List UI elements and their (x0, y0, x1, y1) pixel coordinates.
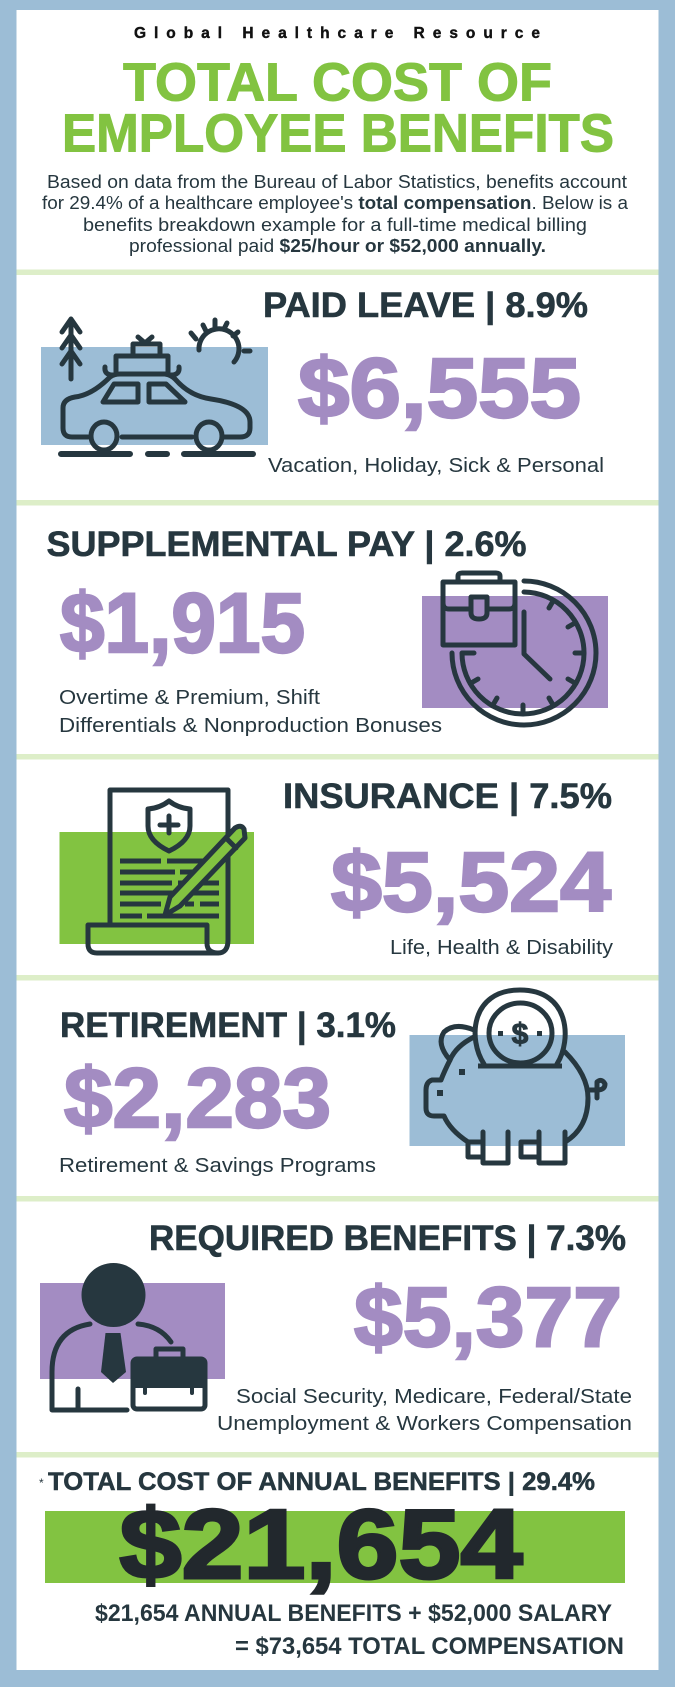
description: Vacation, Holiday, Sick & Personal (268, 455, 604, 477)
intro text: benefits breakdown example for a full-time medical billing (83, 215, 587, 235)
total compensation equation: $21,654 ANNUAL BENEFITS + $52,000 SALARY (95, 1600, 612, 1627)
total compensation equation (95, 1600, 624, 1660)
heading: RETIREMENT | 3.1% (60, 1006, 396, 1045)
panel: retirement (59, 990, 625, 1177)
description: Overtime & Premium, Shift (59, 687, 320, 709)
heading: PAID LEAVE | 8.9% (263, 286, 588, 325)
green band (45, 1511, 625, 1583)
amount: $6,555 (298, 341, 581, 435)
icon: clock and briefcase (422, 573, 608, 725)
footnote marker: * (39, 1476, 44, 1490)
amount: $5,524 (331, 835, 611, 929)
heading: SUPPLEMENTAL PAY | 2.6% (46, 525, 526, 564)
panel: required benefits (40, 1219, 632, 1435)
title: EMPLOYEE BENEFITS (62, 104, 614, 164)
icon: insurance document (60, 790, 254, 953)
icon: piggy bank: $ (512, 1018, 529, 1051)
intro text: for 29.4% of a healthcare employee's total compensation . Below is a (42, 193, 629, 213)
description: Unemployment & Workers Compensation (217, 1413, 632, 1435)
panel: paid leave (41, 286, 604, 477)
amount: $2,283 (64, 1051, 331, 1145)
panel: total cost (39, 1468, 625, 1660)
intro text: Based on data from the Bureau of Labor Statistics, benefits account (47, 172, 627, 192)
panel: supplemental pay (46, 525, 608, 737)
title: TOTAL COST OF (123, 52, 552, 112)
amount: $1,915 (60, 576, 305, 670)
description: Social Security, Medicare, Federal/State (236, 1386, 632, 1408)
icon: businessperson with briefcase (40, 1263, 225, 1410)
description: Retirement & Savings Programs (59, 1155, 376, 1177)
icon: car road trip (41, 319, 268, 454)
amount: $5,377 (354, 1270, 622, 1364)
heading: TOTAL COST OF ANNUAL BENEFITS | 29.4% (48, 1468, 595, 1496)
description (217, 1386, 632, 1435)
panel: insurance (60, 777, 613, 959)
description: Life, Health & Disability (390, 937, 613, 959)
description (59, 687, 442, 737)
source label: Global Healthcare Resource (134, 25, 540, 42)
total compensation equation: = $73,654 TOTAL COMPENSATION (235, 1633, 624, 1660)
title (62, 52, 614, 164)
heading: INSURANCE | 7.5% (283, 777, 612, 816)
intro text (42, 172, 629, 256)
icon: piggy bank (410, 990, 625, 1163)
heading: REQUIRED BENEFITS | 7.3% (149, 1219, 626, 1258)
header block (42, 25, 629, 256)
intro text: professional paid $25/hour or $52,000 annually. (129, 236, 546, 256)
total amount: $21,654 (120, 1489, 522, 1599)
description: Differentials & Nonproduction Bonuses (59, 715, 442, 737)
